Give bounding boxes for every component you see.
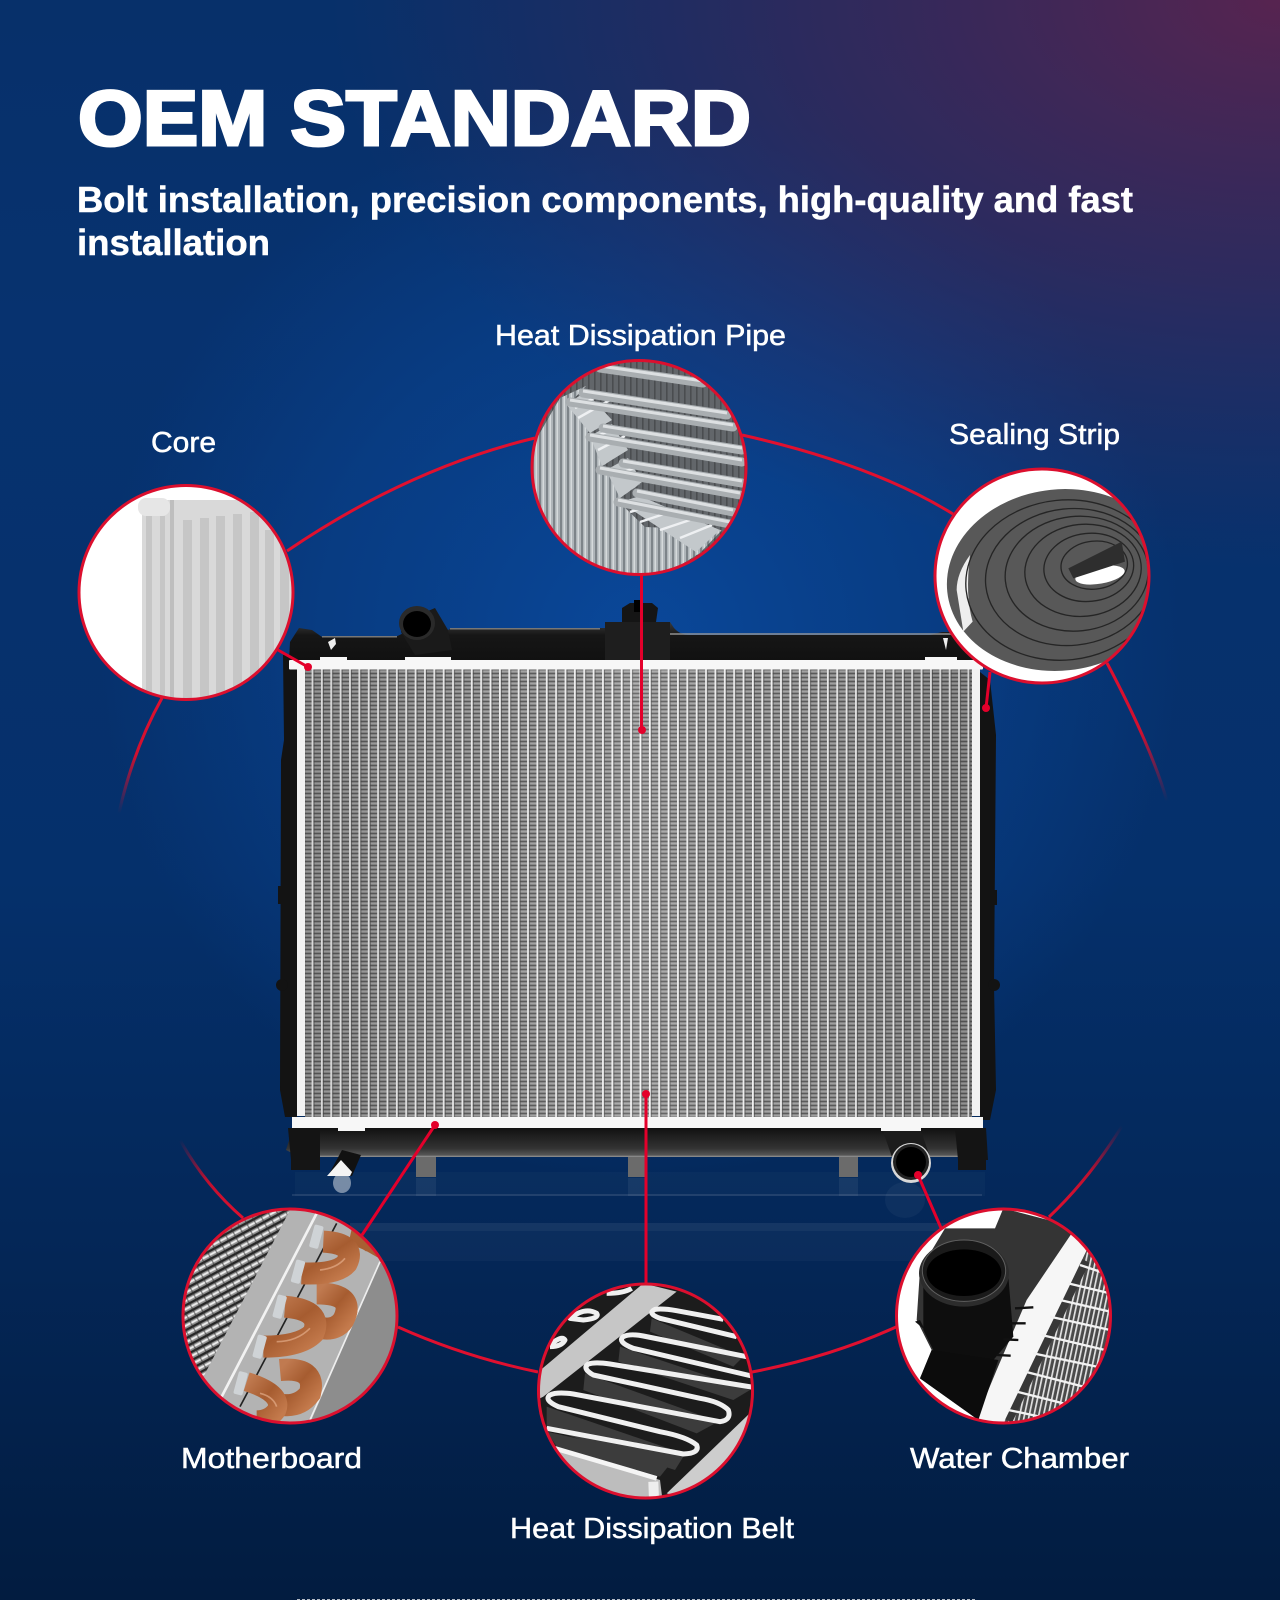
radiator	[276, 600, 1000, 1183]
subtitle: Bolt installation, precision components, high-quality and fast	[77, 179, 1133, 220]
panel: heat dissipation belt detail circle	[533, 1280, 760, 1507]
panel: heat dissipation pipe detail circle	[530, 358, 750, 590]
label: heat dissipation pipe: Heat Dissipation Pipe	[495, 320, 786, 352]
label: sealing strip: Sealing Strip	[949, 419, 1120, 451]
red connecting ring arcs	[119, 435, 1167, 1372]
subtitle: installation	[77, 222, 270, 263]
label: water chamber: Water Chamber	[910, 1443, 1129, 1475]
label: motherboard: Motherboard	[181, 1443, 362, 1475]
radiator top white header	[289, 657, 983, 670]
subtitle	[77, 179, 1133, 263]
radiator white side plates	[297, 669, 980, 1116]
panel: sealing strip detail circle	[934, 468, 1150, 684]
radiator bottom white header	[292, 1117, 983, 1131]
panel: core detail circle	[79, 485, 294, 700]
radiator lower tank	[286, 1128, 988, 1177]
leader lines and dots	[278, 575, 990, 1284]
label: core: Core	[151, 427, 216, 459]
radiator reflection	[292, 1172, 985, 1261]
radiator core fins	[305, 669, 972, 1117]
radiator bottom drain plug	[327, 1150, 361, 1176]
panel: water chamber detail circle	[893, 1207, 1117, 1427]
radiator upper tank	[289, 600, 982, 660]
label: heat dissipation belt: Heat Dissipation Belt	[510, 1513, 794, 1545]
title: OEM STANDARD	[78, 74, 751, 162]
panel: motherboard detail circle	[180, 1207, 400, 1427]
radiator lower outlet hose	[883, 1131, 931, 1183]
radiator side brackets	[276, 655, 1000, 1120]
